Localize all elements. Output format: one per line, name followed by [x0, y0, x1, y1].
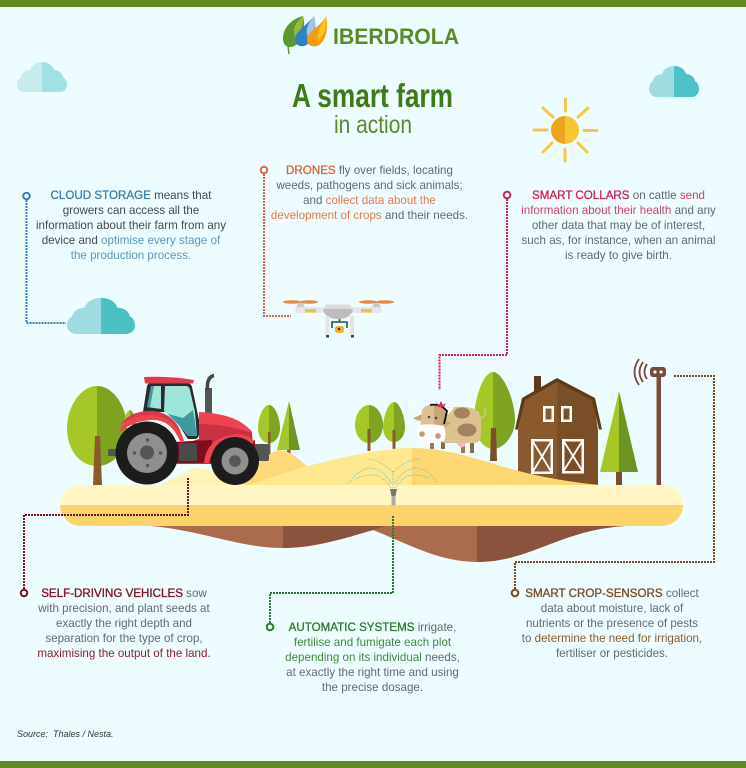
text: automatic systems: the precise dosage.	[322, 681, 423, 694]
text: smart collars: information about their health and any	[521, 204, 716, 217]
farm island	[60, 359, 683, 562]
top bar	[0, 0, 746, 7]
connector: smart crop-sensors	[512, 376, 714, 596]
hill: rear	[235, 450, 310, 485]
barn	[515, 376, 602, 485]
title	[292, 77, 453, 139]
icon: cloud storage cloud	[67, 298, 135, 334]
text: drones: DRONES fly over fields, locating	[286, 164, 453, 177]
icon: sprinkler water	[349, 459, 438, 488]
tractor	[108, 376, 269, 485]
tree: pine right	[600, 391, 638, 485]
cow	[413, 401, 486, 453]
icon: pale cloud	[17, 62, 67, 92]
tree: large left	[67, 386, 127, 485]
text: cloud storage: information about their farm from any	[36, 219, 226, 232]
text: automatic systems	[285, 621, 460, 694]
text: smart crop-sensors: data about moisture, lack of	[541, 602, 683, 615]
tree: round near cow	[355, 405, 383, 451]
text: smart crop-sensors: nutrients or the presence of pests	[526, 617, 698, 630]
text: smart collars	[521, 189, 716, 262]
connector: smart collars	[440, 192, 510, 390]
text: automatic systems: at exactly the right time and using	[286, 666, 459, 679]
text: smart collars: is ready to give birth.	[565, 249, 672, 262]
connector: automatic systems	[267, 516, 393, 630]
text: smart crop-sensors: to determine the need for irrigation,	[522, 632, 702, 645]
text: self-driving vehicles	[37, 587, 211, 660]
text: self-driving vehicles: separation for the type of crop,	[45, 632, 203, 645]
text: drones	[271, 164, 468, 222]
text: cloud storage: device and optimise every stage of	[42, 234, 220, 247]
text: drones: and collect data about the	[303, 194, 436, 207]
tree: oval near cow	[383, 402, 405, 449]
tree: large behind cow	[474, 372, 515, 461]
icon: sensor antenna	[634, 359, 666, 485]
icon: sun	[534, 99, 597, 161]
text: automatic systems: AUTOMATIC SYSTEMS irrigate,	[289, 621, 456, 634]
text: self-driving vehicles: SELF-DRIVING VEHICLES sow	[41, 587, 207, 600]
text: self-driving vehicles: with precision, and plant seeds at	[38, 602, 210, 615]
connector: self-driving vehicles	[21, 478, 188, 596]
logo: Iberdrola: IBERDROLA	[333, 24, 459, 49]
source note: Source: Thales / Nesta.	[17, 728, 114, 738]
text: cloud storage: CLOUD STORAGE means that	[51, 189, 211, 202]
text: automatic systems: fertilise and fumigate each plot	[294, 636, 451, 649]
text: smart crop-sensors	[522, 587, 702, 660]
hill: main	[250, 448, 600, 485]
logo: Iberdrola	[283, 16, 459, 54]
text: smart crop-sensors: fertiliser or pesticides.	[556, 647, 668, 660]
tree: small round	[258, 405, 280, 456]
text: cloud storage: the production process.	[71, 249, 191, 262]
hill: foreground under tractor	[160, 468, 245, 485]
text: cloud storage: growers can access all the	[63, 204, 199, 217]
connector: cloud storage	[23, 193, 66, 323]
text: smart crop-sensors: SMART CROP-SENSORS collect	[525, 587, 699, 600]
platform	[60, 485, 683, 526]
text: smart collars: SMART COLLARS on cattle send	[532, 189, 705, 202]
island underside	[150, 526, 625, 562]
icon: sprinkler	[390, 489, 397, 506]
title: in action	[334, 111, 412, 139]
icon: right cloud	[649, 66, 699, 97]
text: self-driving vehicles: maximising the output of the land.	[37, 647, 211, 660]
tree: small pine	[277, 401, 300, 457]
text: drones: weeds, pathogens and sick animals;	[276, 179, 463, 192]
connector: drones	[261, 167, 291, 316]
text: drones: development of crops and their needs.	[271, 209, 468, 222]
text: cloud storage	[36, 189, 226, 262]
tree: small behind tractor	[124, 410, 136, 425]
text: smart collars: other data that may be of interest,	[532, 219, 705, 232]
text: automatic systems: depending on its individual needs,	[285, 651, 460, 664]
title: A smart farm	[292, 77, 453, 114]
text: smart collars: such as, for instance, when an animal	[522, 234, 715, 247]
text: self-driving vehicles: exactly the right depth and	[56, 617, 192, 630]
icon: drone	[283, 300, 394, 338]
bottom bar	[0, 761, 746, 768]
